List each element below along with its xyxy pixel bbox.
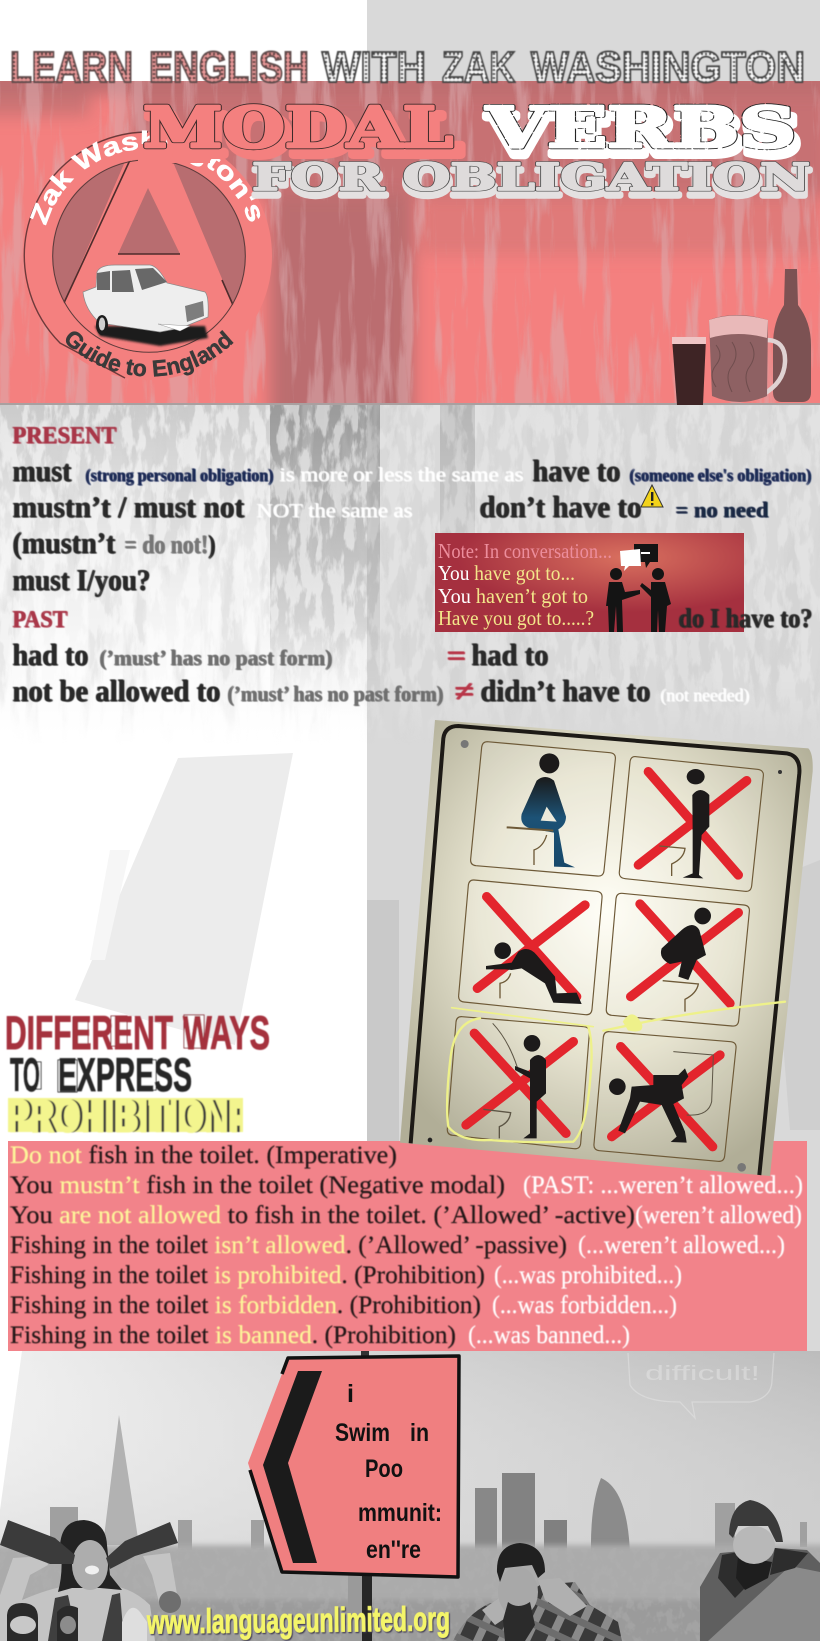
word: modal: MODAL bbox=[143, 95, 453, 161]
heading: learn english with zak washington: ENGLISH bbox=[149, 43, 309, 92]
faint speech bubble bbox=[628, 1353, 774, 1418]
line: different ways: DIFFERENT bbox=[5, 1006, 173, 1059]
coat strap bbox=[708, 1566, 820, 1641]
icon: pint bbox=[672, 337, 706, 405]
heading: different ways to express prohibition bbox=[5, 1006, 270, 1142]
prohibition sentences bbox=[10, 1142, 803, 1349]
man collar bbox=[482, 1578, 587, 1625]
row: must: have to bbox=[532, 453, 620, 488]
sign text bbox=[335, 1380, 442, 1564]
man face bbox=[498, 1567, 538, 1617]
woman vest bbox=[48, 1593, 124, 1641]
row: forbidden: Fishing in the toilet is forbidden. (Prohibition) bbox=[10, 1292, 481, 1319]
note text: You have got to... bbox=[438, 561, 575, 585]
line: to express: TO bbox=[10, 1048, 40, 1101]
icon: warning triangle bbox=[641, 485, 663, 507]
sign text: Poo bbox=[365, 1455, 403, 1483]
line: to express: EXPRESS bbox=[58, 1048, 192, 1101]
man hair bbox=[497, 1543, 545, 1582]
person: man with hat bbox=[700, 1500, 820, 1641]
the shard tower bbox=[103, 1415, 139, 1545]
icon: three-wheeled car bbox=[83, 265, 208, 346]
jumper bbox=[736, 1556, 772, 1590]
row: had to: (’must’ has no past form) bbox=[99, 645, 332, 670]
sign screws bbox=[428, 740, 782, 1172]
icon: bottle bbox=[773, 269, 811, 402]
panel: no fishing, circled bbox=[447, 1017, 589, 1149]
logo inner disc bbox=[52, 159, 246, 353]
row: not be allowed to: (not needed) bbox=[660, 685, 749, 706]
row: mustn't bbox=[12, 489, 768, 524]
subtitle: for obligation bbox=[252, 155, 811, 205]
note box: in conversation bbox=[435, 533, 744, 632]
london skyline backdrop bbox=[0, 1351, 820, 1641]
word: verbs: VERBS bbox=[485, 95, 796, 161]
logo ring bbox=[24, 132, 272, 380]
collar bbox=[718, 1548, 808, 1598]
word: verbs: VERBS bbox=[487, 103, 800, 169]
logo top arc text bbox=[46, 149, 250, 226]
word: modal: MODAL bbox=[143, 95, 453, 161]
person: bearded man bbox=[453, 1543, 622, 1641]
row: negative modal: (PAST: ...weren’t allowed...) bbox=[523, 1172, 803, 1199]
woman bottles bbox=[0, 1520, 178, 1569]
header band bbox=[0, 70, 820, 425]
note text: Have you got to.....? bbox=[438, 606, 594, 630]
sign text: en''re bbox=[366, 1536, 421, 1564]
row: must bbox=[12, 453, 811, 488]
logo letter A bbox=[52, 160, 246, 353]
row: had to bbox=[12, 637, 548, 672]
row: mustn't means do not bbox=[12, 525, 215, 560]
line: prohibition: PROHIBITION: bbox=[8, 1090, 240, 1142]
sign border bbox=[411, 726, 799, 1175]
note text: You haven’t got to bbox=[438, 584, 588, 608]
sign text: in bbox=[410, 1419, 429, 1447]
sign chevron bbox=[263, 1371, 322, 1563]
line: different ways: WAYS bbox=[183, 1006, 270, 1059]
icon: stein bbox=[709, 315, 785, 402]
beer pump badges bbox=[7, 1603, 78, 1641]
row: must: is more or less the same as bbox=[279, 464, 523, 486]
sign text: Swim bbox=[335, 1419, 390, 1447]
man jacket bbox=[453, 1582, 622, 1641]
section: past bbox=[12, 607, 749, 708]
subtitle: for obligation: FOR OBLIGATION bbox=[252, 155, 810, 199]
row: mustn't: = no need bbox=[675, 497, 768, 522]
website url: www.languageunlimited.org bbox=[146, 1600, 450, 1641]
note text bbox=[438, 539, 612, 630]
grunge backdrop behind grammar text bbox=[0, 405, 820, 745]
sign text: i bbox=[347, 1380, 354, 1408]
row: mustn't: NOT the same as bbox=[256, 500, 412, 522]
sign plate bbox=[400, 720, 813, 1176]
row: must i/you: must I/you? bbox=[12, 562, 150, 597]
heading: learn english with zak washington: LEARN bbox=[10, 43, 133, 92]
sign text: mmunit: bbox=[358, 1499, 442, 1527]
word: modal: MODAL bbox=[146, 103, 462, 169]
label: present: PRESENT bbox=[12, 423, 116, 449]
woman hair bbox=[58, 1520, 122, 1592]
subtitle: for obligation: FOR OBLIGATION bbox=[252, 155, 810, 199]
logo: zak washington's guide to england: Guide to England bbox=[66, 330, 234, 377]
section: present bbox=[12, 423, 811, 597]
row: not be allowed to: didn’t have to bbox=[480, 673, 650, 708]
row: mustn't means do not: = do not!) bbox=[124, 530, 215, 559]
row: must: (strong personal obligation) bbox=[85, 465, 273, 486]
pink panel: ways to express prohibition bbox=[8, 1141, 807, 1351]
row: mustn't: don’t have to bbox=[479, 489, 641, 524]
row: prohibited: (...was prohibited...) bbox=[494, 1262, 682, 1289]
woman face bbox=[72, 1540, 108, 1590]
toilet rules sign photo bbox=[400, 720, 813, 1176]
panel: no standing bbox=[619, 757, 763, 891]
line: prohibition: PROHIBITION: bbox=[11, 1090, 243, 1142]
row: banned: (...was banned...) bbox=[468, 1322, 630, 1349]
sign face bbox=[248, 1356, 459, 1577]
row: negative modal: You mustn’t fish in the toilet (Negative modal) bbox=[10, 1172, 505, 1199]
row: allowed active: (weren’t allowed) bbox=[635, 1202, 802, 1229]
row: had to: = bbox=[446, 639, 466, 672]
icons: beer glasses and bottle bbox=[672, 269, 811, 405]
note text: Note: In conversation... bbox=[438, 539, 612, 563]
title: modal verbs bbox=[138, 95, 800, 169]
row: not be allowed to: (’must’ has no past form) bbox=[227, 681, 443, 706]
row: imperative: Do not fish in the toilet. (Imperative) bbox=[10, 1142, 397, 1169]
subtitle: for obligation: FOR OBLIGATION bbox=[253, 161, 811, 205]
row: mustn't: mustn’t / must not bbox=[12, 489, 245, 524]
logo bottom arc text bbox=[63, 340, 236, 376]
logo: zak washington's guide to england: Zak Washington's bbox=[30, 130, 260, 226]
row: must: must bbox=[12, 453, 72, 488]
face bbox=[733, 1526, 775, 1564]
row: not be allowed to: ≠ bbox=[454, 675, 474, 708]
row: allowed active: You are not allowed to fish in the toilet. (’Allowed’ -active) bbox=[10, 1202, 635, 1229]
row: allowed passive: (...weren’t allowed...) bbox=[578, 1232, 785, 1259]
panel: no kneeling bbox=[459, 880, 602, 1015]
row: not be allowed to bbox=[12, 673, 749, 708]
hair bbox=[729, 1500, 783, 1542]
word: verbs: VERBS bbox=[485, 95, 796, 161]
city towers bbox=[50, 1473, 807, 1548]
panel: permitted sitting bbox=[471, 742, 615, 876]
panel: no head in toilet bbox=[594, 1032, 736, 1161]
heading: learn english with zak washington: ZAK bbox=[442, 43, 515, 92]
word: modal bbox=[138, 95, 462, 169]
row: banned: Fishing in the toilet is banned. (Prohibition) bbox=[10, 1322, 456, 1349]
row: had to: had to bbox=[471, 637, 548, 672]
row: mustn't means do not: (mustn’t bbox=[12, 525, 116, 560]
line: to express bbox=[10, 1048, 192, 1101]
people in foreground bbox=[0, 1500, 820, 1641]
panel: no squatting bbox=[606, 893, 749, 1026]
row: forbidden: (...was forbidden...) bbox=[492, 1292, 677, 1319]
woman arms and chest bbox=[0, 1553, 178, 1641]
ghost tower building bbox=[75, 753, 820, 1145]
faint speech bubble: difficult! bbox=[645, 1363, 760, 1385]
road sign: swim in poo community centre bbox=[248, 1351, 459, 1641]
label: past: PAST bbox=[12, 607, 67, 633]
row: had to: had to bbox=[12, 637, 88, 672]
logo: zak washington's guide to england bbox=[24, 130, 272, 380]
coat bbox=[700, 1548, 820, 1641]
sign post bbox=[348, 1351, 372, 1641]
city rooftops bbox=[0, 1545, 820, 1641]
row: not be allowed to: not be allowed to bbox=[12, 673, 220, 708]
word: verbs bbox=[485, 95, 800, 169]
icon: two people talking bbox=[606, 544, 671, 632]
person: woman with bottles bbox=[0, 1520, 181, 1641]
highlight: yellow circle and arrow bbox=[447, 1002, 785, 1142]
heading: learn english with zak washington: WITH bbox=[322, 43, 426, 92]
row: allowed passive: Fishing in the toilet isn’t allowed. (’Allowed’ -passive) bbox=[10, 1232, 567, 1259]
row: negative modal bbox=[10, 1172, 803, 1199]
heading: learn english with zak washington bbox=[10, 43, 805, 92]
row: prohibited: Fishing in the toilet is prohibited. (Prohibition) bbox=[10, 1262, 485, 1289]
